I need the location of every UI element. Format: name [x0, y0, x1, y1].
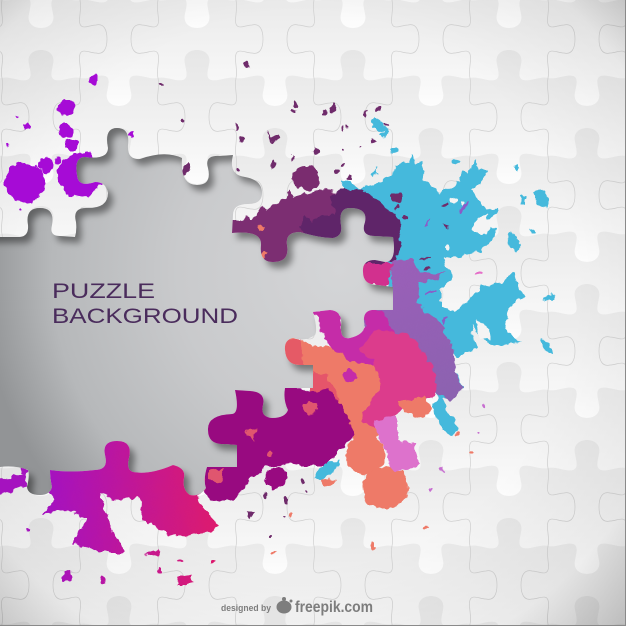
credit: freepik: [221, 597, 373, 616]
splat: bright purple left: [5, 76, 134, 212]
splat: pink core: [360, 330, 437, 428]
splat: orchid: [373, 416, 420, 472]
splat: salmon details: [280, 338, 433, 509]
title: Puzzle Background: [52, 280, 238, 328]
splat: magenta patch at side knob: [360, 262, 392, 285]
splat: cyan: [315, 118, 555, 481]
icon: freepik logo: [276, 597, 292, 614]
paint splatter layer: [0, 60, 555, 586]
white gaps in cyan: [446, 198, 490, 340]
credit text: designed by: [221, 603, 272, 614]
orange spots on dark magenta: [208, 401, 317, 482]
title line two: BACKGROUND: [52, 305, 238, 328]
splat: magenta: [313, 308, 395, 367]
missing puzzle pieces hole with shadow: [0, 128, 394, 496]
splat: small pink and orange droplets: [272, 269, 486, 554]
splat: violet: [355, 258, 462, 400]
splat: dark purple piece: [225, 165, 403, 270]
splat: violet streaks: [423, 200, 469, 325]
splat: dark magenta piece: [200, 385, 355, 502]
splat: salmon base: [290, 338, 381, 440]
freepik wordmark: freepik.com: [295, 599, 373, 616]
splat: purple droplets: [160, 60, 449, 538]
splat: left magenta band: [0, 440, 220, 586]
title line one: PUZZLE: [52, 280, 155, 303]
